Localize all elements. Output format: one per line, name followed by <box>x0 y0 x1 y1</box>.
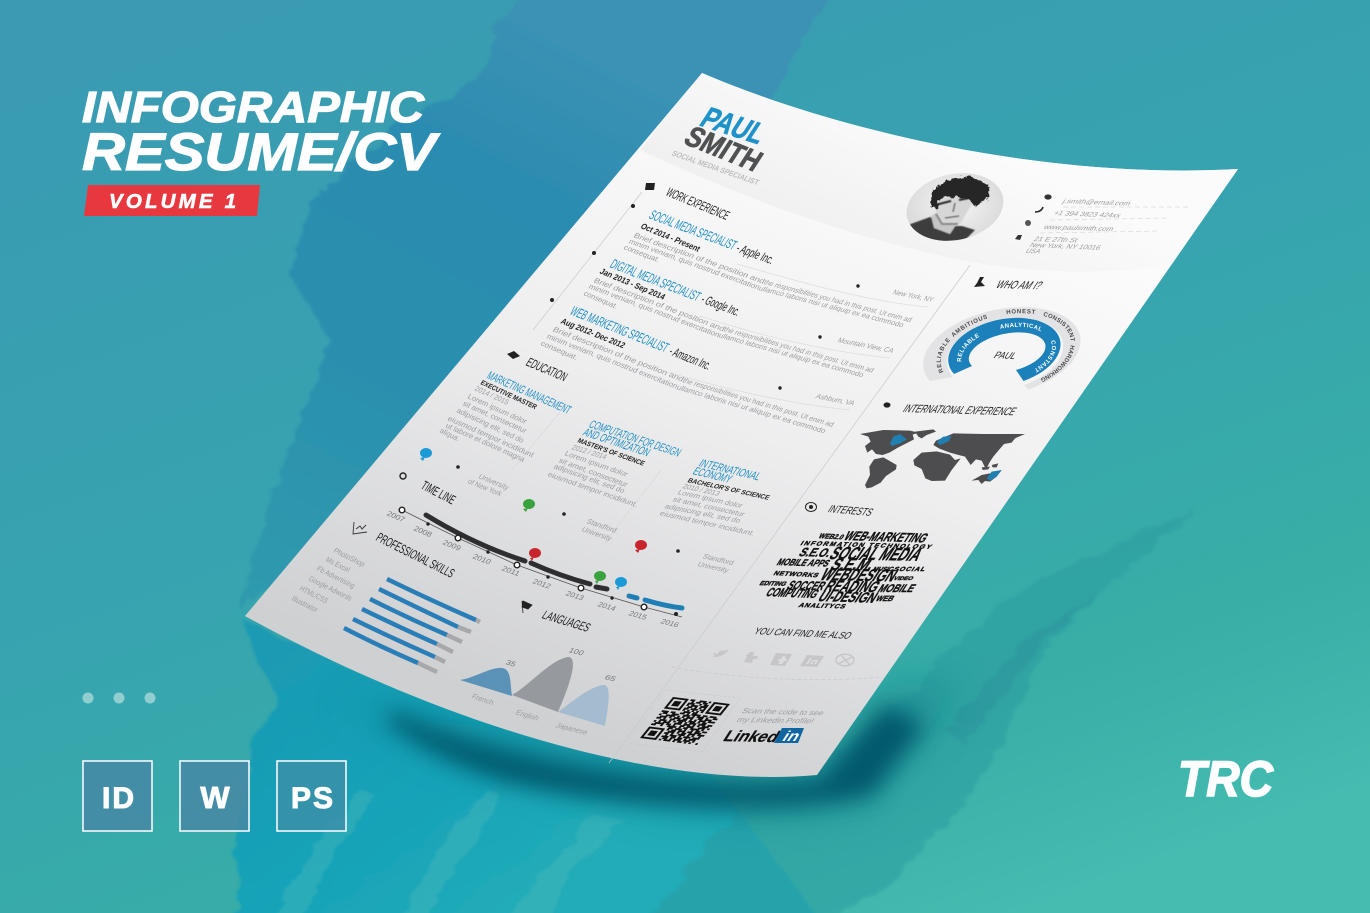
pin: red <box>529 548 541 561</box>
education column 1 <box>420 369 574 498</box>
education column 3: Standford <box>701 552 736 567</box>
job 3: Aug 2012- Dec 2012 <box>559 316 627 350</box>
icon: graduation cap <box>507 351 520 359</box>
icon: flag <box>522 601 532 613</box>
ring labels: HONEST <box>1006 309 1036 314</box>
education column 2: adipisicing elit, sed do <box>552 462 627 495</box>
word cloud: NETWORKS <box>772 571 820 579</box>
chart values and labels: French <box>470 692 496 707</box>
bars <box>426 515 682 608</box>
education column 2: Standford <box>585 517 619 535</box>
education column 1: sit amet, consectetur <box>461 399 529 435</box>
icon: person <box>974 277 985 287</box>
job 1 <box>622 208 936 329</box>
education column 3: ECONOMY <box>690 465 735 485</box>
education column 3: 2010 / 2013 <box>681 482 722 498</box>
education column 2: MASTER'S OF SCIENCE <box>576 436 647 467</box>
badge: W <box>180 761 249 831</box>
word cloud: SOCCER <box>784 578 829 593</box>
education column 3: adipisicing elit, sed do <box>663 502 743 525</box>
job 1: Oct 2014 - Present <box>639 222 702 253</box>
icon: tumblr <box>744 652 758 663</box>
section: who am I: WHO AM I? <box>993 278 1046 292</box>
job 2: minim veniam, quis nostrud exercitation <box>587 282 722 339</box>
education column 3: INTERNATIONAL <box>696 457 764 483</box>
ring labels: RELIABLE <box>957 333 980 362</box>
year labels: 2015 <box>627 609 649 621</box>
job 3: Ashburn, VA <box>814 392 858 407</box>
section: education <box>420 351 771 574</box>
section: social links <box>712 626 854 667</box>
job 2 <box>582 257 897 379</box>
icon: home <box>1015 235 1022 240</box>
title: Infographic Resume/CV: INFOGRAPHIC <box>82 83 425 132</box>
pin: green <box>523 499 535 512</box>
contact details: www.paulsmith.com <box>1041 223 1116 233</box>
ring labels: AMBITIOUS <box>952 314 987 337</box>
education column 1: MARKETING MANAGEMENT <box>484 369 574 417</box>
title: Infographic Resume/CV: RESUME/CV <box>82 123 441 182</box>
section: work experience: WORK EXPERIENCE <box>663 185 732 222</box>
word cloud <box>758 529 933 610</box>
job 3: minim veniam, quis nostrud exercitation <box>545 332 680 390</box>
resume sheet <box>245 73 1238 777</box>
word cloud: VIDEO <box>892 577 914 582</box>
year labels: 2007 <box>385 509 407 524</box>
skill labels <box>290 546 367 614</box>
education column 2: AND OPTIMIZATION <box>580 426 653 459</box>
section: international experience <box>860 402 1025 488</box>
education column 3: eiusmod tempor incididunt. <box>658 509 757 537</box>
word cloud: COMPUTING <box>763 585 822 601</box>
education column 1: of New York <box>466 477 504 498</box>
word cloud: S.E.M. <box>826 556 879 574</box>
name: Paul Smith: PAUL <box>694 101 773 150</box>
chart values and labels: 100 <box>567 646 586 657</box>
skill labels: PhotoShop <box>332 546 367 569</box>
pin: blue <box>615 577 627 590</box>
education column 2: COMPUTATION FOR DESIGN <box>586 418 684 459</box>
education column 3: BACHELOR'S OF SCIENCE <box>686 477 771 502</box>
year labels: 2016 <box>659 617 681 629</box>
ring labels: CONSTANT <box>1035 340 1056 373</box>
QR frame <box>628 690 740 752</box>
job 1: consequat. <box>622 243 662 264</box>
word cloud: WEB-MARKETING <box>841 529 931 546</box>
job 3: Brief description of the position and <box>551 325 686 383</box>
contact details: 21 E 27th St <box>1032 235 1081 244</box>
section: professional skills <box>290 522 480 672</box>
contact details <box>1015 194 1133 255</box>
job 3: the responsibilities you had in this post. Ut enim ad <box>681 376 836 429</box>
skill labels: Illustrator <box>290 594 320 614</box>
chart values and labels: 65 <box>603 673 618 683</box>
word cloud: MOBILE <box>875 582 919 595</box>
education column 3: Lorem ipsum dolor <box>676 488 745 510</box>
word cloud: UI-DESIGN <box>815 588 881 606</box>
area chart: Japanese <box>558 685 609 726</box>
year labels: 2013 <box>564 589 586 602</box>
portrait photo <box>906 173 1004 241</box>
skill labels: Google Adwords <box>307 574 354 603</box>
skill labels: Ms Excel <box>324 555 352 574</box>
job 1: SOCIAL MEDIA SPECIALIST <box>646 208 739 253</box>
job 1: the responsibilities you had in this post. Ut enim ad <box>762 278 914 324</box>
section: work experience <box>539 183 936 435</box>
year labels: 2012 <box>531 577 553 590</box>
word cloud: WEBDESIGN <box>816 566 901 586</box>
education column 3: sit amet, consectetur <box>671 495 747 518</box>
footer: QR code and LinkedIn <box>628 690 827 752</box>
education column 1: eiusmod tempor incididunt <box>446 414 536 459</box>
job 3: WEB MARKETING SPECIALIST <box>567 304 671 356</box>
job 3: consequat. <box>539 339 580 362</box>
icon: briefcase <box>645 183 655 190</box>
logo: TRC: TRC <box>1178 751 1274 807</box>
section: who am I: PAUL <box>991 350 1019 362</box>
year labels: 2009 <box>441 538 463 552</box>
section: languages <box>460 601 618 736</box>
ring labels <box>936 309 1075 382</box>
icon: phone <box>1035 207 1043 212</box>
word cloud: S.E.O. <box>796 545 835 559</box>
year labels: 2008 <box>412 524 434 539</box>
icon: location pin <box>884 402 890 408</box>
section: interests <box>758 502 933 610</box>
education column 1: 2014 / 2015 <box>473 384 511 407</box>
axis line <box>402 510 682 617</box>
job 3: - Amazon Inc. <box>666 344 714 372</box>
word cloud: SOCIAL MEDIA <box>825 544 927 565</box>
job 2: - Google Inc. <box>698 292 743 319</box>
ring: core traits <box>948 318 1061 381</box>
badge: PS: PS <box>291 782 335 815</box>
skill labels: HTML/CSS <box>298 584 330 605</box>
job 1: ullamco laboris nisi ut aliquip ex ea commodo <box>757 284 906 329</box>
job 2: the responsibilities you had in this post. Ut enim ad <box>722 325 876 374</box>
job 1: Brief description of the position and <box>632 231 767 285</box>
education column 1: ut labore et dolore magna <box>444 421 527 464</box>
name: Paul Smith: SOCIAL MEDIA SPECIALIST <box>670 149 761 187</box>
section: interests: INTERESTS <box>825 503 876 518</box>
pin: red <box>635 540 647 553</box>
education column 1: adipisicing elit, sed do <box>455 406 526 445</box>
word cloud: INFORMATION TECHNOLOGY <box>799 541 933 551</box>
job 2: consequat. <box>582 289 620 310</box>
contact details: +1 394 3823 424xx <box>1052 209 1123 219</box>
job 2: Jan 2013 - Sep 2014 <box>598 267 667 302</box>
contact details: USA <box>1024 247 1044 255</box>
education column 1: aliqua. <box>438 426 462 443</box>
education column 2: 2012 / 2014 <box>570 443 609 461</box>
hair <box>930 176 990 208</box>
section: timeline: TIME LINE <box>418 478 459 507</box>
QR code <box>640 697 730 745</box>
education column 1: EXECUTIVE MASTER <box>479 378 539 411</box>
section: who am I <box>923 277 1080 390</box>
job 1: New York, NY <box>891 288 936 304</box>
badge: ID <box>83 761 152 831</box>
world map <box>860 429 1025 488</box>
education column 2 <box>523 418 684 543</box>
ring labels: ANALYTICAL <box>1000 322 1042 332</box>
year labels: 2014 <box>596 600 618 613</box>
education column 2: University <box>580 525 614 543</box>
job 3 <box>539 304 858 435</box>
timeline dots <box>550 204 635 302</box>
scan caption: my Linkedin Profile! <box>735 715 816 725</box>
icon: dribbble <box>836 654 854 666</box>
icon: twitter <box>712 649 729 657</box>
column dividers <box>512 192 1188 763</box>
education column 2: eiusmod tempor incididunt. <box>546 470 640 509</box>
scan caption: Scan the code to see <box>740 706 827 717</box>
pin: green <box>594 571 606 584</box>
section: professional skills: PROFESSIONAL SKILLS <box>373 530 458 580</box>
icon: email <box>1044 194 1052 200</box>
header band <box>640 73 1238 271</box>
job 1: minim veniam, quis nostrud exercitation <box>627 237 762 291</box>
word cloud: SOCIAL <box>892 567 927 573</box>
area chart: English <box>512 657 573 712</box>
name: Paul Smith <box>670 101 773 187</box>
LinkedIn logo: Linked <box>720 727 784 745</box>
icon: line chart <box>353 522 367 534</box>
ring labels: RELIABLE <box>936 338 950 374</box>
icon: facebook <box>770 653 792 666</box>
job 2: Brief description of the position and <box>592 276 727 333</box>
education column 1: University <box>477 472 511 492</box>
title: Infographic Resume/CV <box>82 83 441 182</box>
word cloud: WEB <box>874 594 897 603</box>
word cloud: WEB2.0 <box>817 532 846 541</box>
chart values and labels: Japanese <box>554 721 590 736</box>
badge: W: W <box>200 780 230 815</box>
chart values and labels <box>470 646 618 736</box>
job 1: - Apple Inc. <box>733 241 777 267</box>
education column 3: University <box>696 560 731 574</box>
name: Paul Smith: SMITH <box>678 120 769 177</box>
year labels: 2011 <box>500 564 522 578</box>
skill bars <box>344 579 480 672</box>
scan caption <box>735 706 827 725</box>
word cloud: EDITING <box>758 581 788 587</box>
icon: star badge <box>806 502 816 512</box>
software badges <box>83 761 346 831</box>
badge: Volume 1 <box>84 185 260 216</box>
education column 3 <box>635 457 771 574</box>
education column 2: Lorem ipsum dolor <box>563 449 630 478</box>
icon: linkedin <box>800 655 824 667</box>
job 2: DIGITAL MEDIA SPECIALIST <box>607 257 703 305</box>
badge: ID: ID <box>102 782 136 815</box>
job 2: ullamco laboris nisi ut aliquip ex ea commodo <box>717 331 866 379</box>
contact details: New York, NY 10016 <box>1028 241 1103 251</box>
sheet base <box>245 73 1238 777</box>
education column 1: Lorem ipsum dolor <box>466 392 529 426</box>
LinkedIn logo: in <box>779 728 804 744</box>
education column 2: sit amet, consectetur <box>557 456 630 489</box>
contact details: j.smith@email.com <box>1060 197 1133 207</box>
year labels: 2010 <box>471 552 493 566</box>
ring: outer traits <box>923 307 1081 390</box>
icon: watch <box>400 473 406 479</box>
badge: Volume 1: VOLUME 1 <box>109 190 236 213</box>
section: social links: YOU CAN FIND ME ALSO <box>751 626 854 641</box>
ring labels: CONSISTENT <box>1044 312 1075 341</box>
job 2: Mountain View, CA <box>836 336 897 355</box>
chart values and labels: 35 <box>504 658 518 668</box>
skill labels: Fb Advertising <box>315 564 357 590</box>
section: timeline <box>385 473 682 629</box>
chart values and labels: English <box>514 708 541 722</box>
year labels <box>385 509 681 629</box>
ring labels: HARDWORKING <box>1040 345 1075 382</box>
job 3: ullamco laboris nisi ut aliquip ex ea commodo <box>675 383 828 435</box>
area chart: French <box>460 668 512 696</box>
badge: PS <box>277 761 346 831</box>
word cloud: MUSIC <box>871 567 895 573</box>
year markers <box>399 507 647 610</box>
word cloud: ANALITYCS <box>797 603 847 610</box>
icon: globe <box>1025 220 1031 226</box>
section: education: EDUCATION <box>523 355 570 384</box>
word cloud: MOBILE APPS <box>774 557 832 569</box>
carousel dots <box>82 692 156 704</box>
section: international experience: INTERNATIONAL EXPERIENCE <box>900 402 1020 418</box>
pin: blue <box>420 448 432 461</box>
word cloud: READING <box>821 577 884 595</box>
section: languages: LANGUAGES <box>539 608 593 634</box>
